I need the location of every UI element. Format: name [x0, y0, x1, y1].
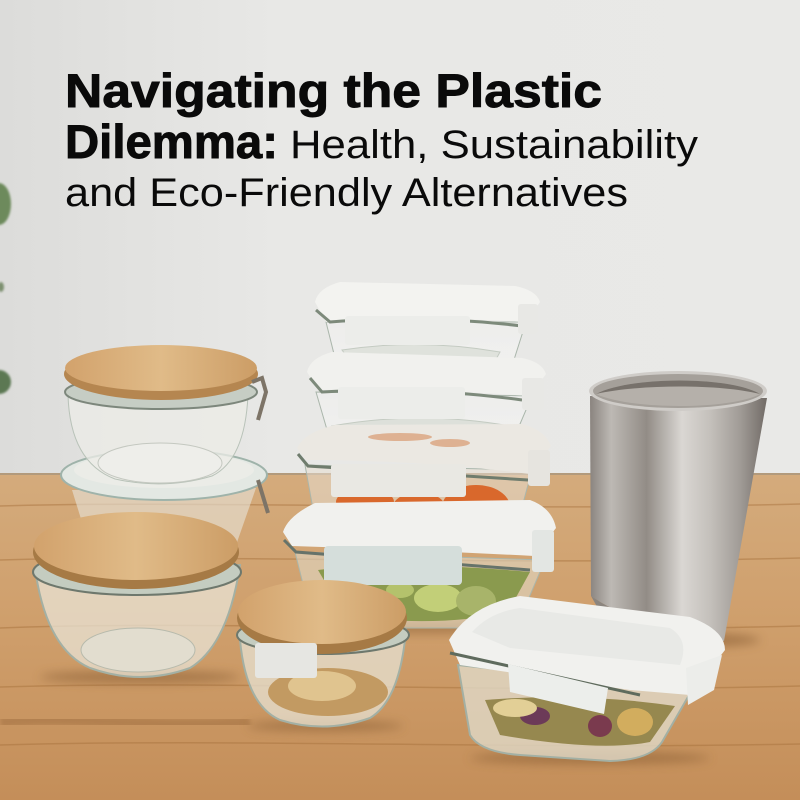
title — [65, 64, 698, 215]
plant leaves at left edge — [0, 183, 11, 394]
container: bottom with salad — [283, 500, 556, 628]
stack of rectangular glass containers — [283, 282, 556, 628]
food: tomato slices — [336, 485, 510, 529]
container: third with tomatoes — [297, 424, 551, 537]
food: mixed salad — [485, 697, 675, 746]
front rectangular container — [449, 596, 725, 761]
title line 2 bold: Dilemma: — [65, 115, 278, 168]
bowl: top round with bamboo lid — [64, 345, 266, 484]
title line 3: and Eco-Friendly Alternatives — [65, 171, 628, 215]
food: dried pieces — [268, 668, 388, 716]
container: top of stack — [315, 282, 540, 378]
food: salad greens — [318, 565, 530, 621]
bowl: middle round with glass lid — [61, 450, 268, 548]
title line 2 regular: Health, Sustainability — [290, 123, 698, 167]
bowl: small with dried food — [237, 580, 409, 727]
title line 1: Navigating the Plastic — [65, 64, 602, 117]
steel canister — [589, 371, 767, 642]
container: second in stack — [307, 352, 546, 455]
bowl: front-left round with bamboo lid — [33, 512, 241, 677]
round glass bowls with bamboo lids — [33, 345, 409, 727]
container shadows — [40, 623, 760, 764]
wall background — [0, 0, 800, 474]
wooden table — [0, 473, 800, 800]
